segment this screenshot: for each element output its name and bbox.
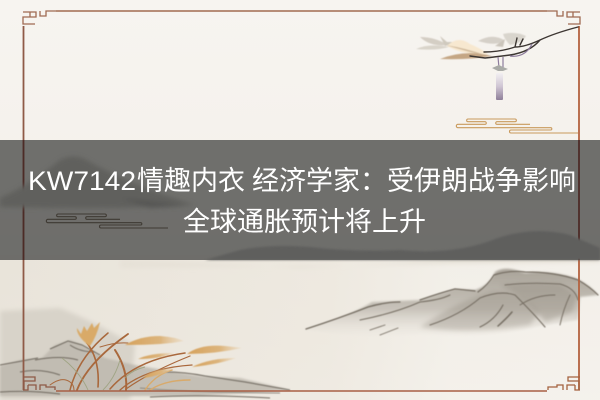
gold clouds, upper right — [456, 119, 578, 133]
band: clouds showing through — [46, 214, 168, 228]
ink mountain, right — [305, 269, 598, 336]
title line 1: 情趣内衣 — [137, 166, 245, 196]
pampas grass stems — [50, 333, 192, 390]
band: lower right hills — [205, 231, 600, 260]
title line 1: 经济学家： — [252, 166, 387, 196]
magnolia branch with tassel — [416, 27, 578, 100]
corner ornament: top left — [23, 11, 56, 24]
band: frame lines showing through — [24, 140, 579, 260]
band: faded mountain ridge — [0, 156, 195, 208]
corner ornament: top right — [547, 11, 580, 24]
distant ink hills, left — [0, 245, 600, 400]
title — [28, 166, 576, 237]
tassel — [496, 73, 503, 100]
title line 2: 全球通胀预计将上升 — [183, 207, 426, 237]
title line 1: 受伊朗战争影响 — [387, 166, 576, 196]
translucent dark title band — [0, 140, 600, 260]
pampas plumes — [77, 322, 242, 378]
magnolia petals — [416, 33, 526, 59]
branch — [470, 27, 578, 58]
corner ornament: bottom left — [23, 377, 55, 390]
title line 1: KW7142 — [28, 166, 136, 196]
tassel knot and cord — [498, 44, 532, 68]
corner ornament: bottom right — [548, 377, 580, 390]
foreground rocks, lower left — [0, 340, 290, 398]
